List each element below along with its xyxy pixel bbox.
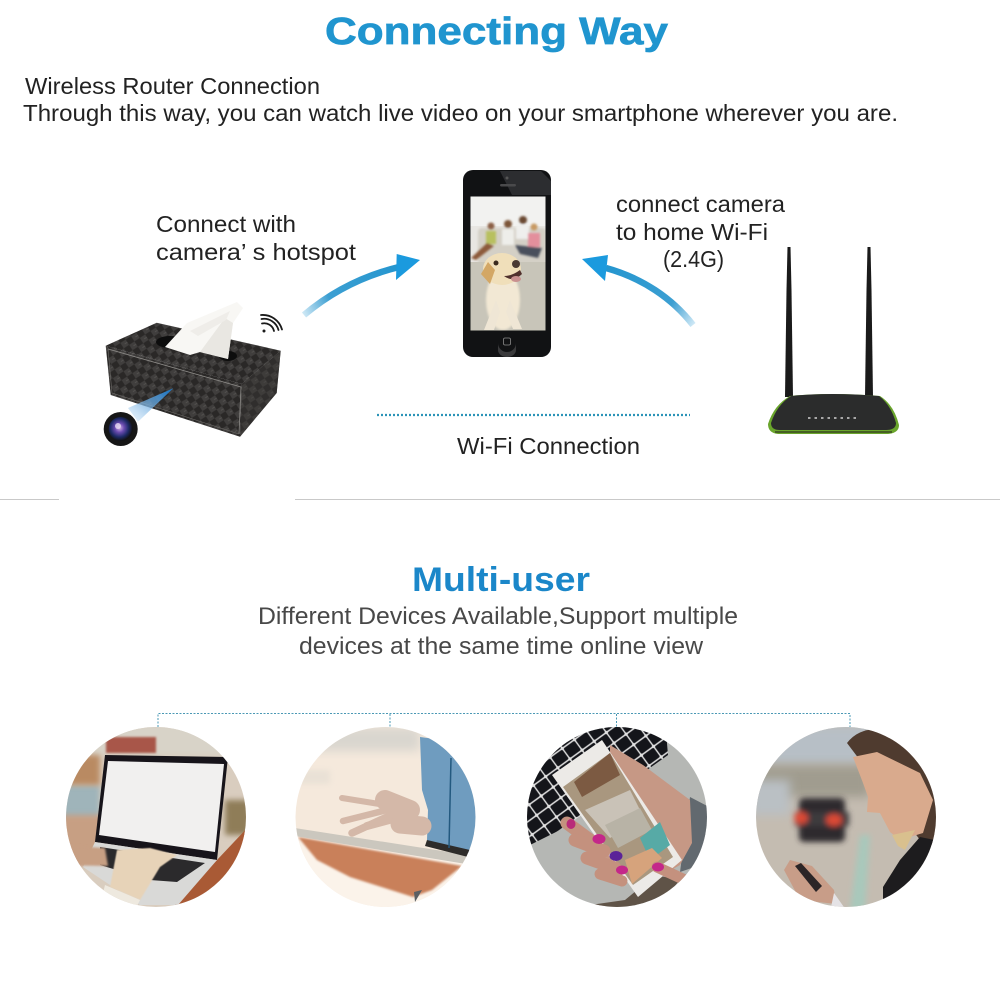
label: connect with camera's hotspot: camera’ s hotspot xyxy=(156,239,357,265)
dotted connector linking devices xyxy=(158,714,850,727)
label: connect with camera's hotspot xyxy=(156,211,357,265)
subheading text block: Through this way, you can watch live video on your smartphone wherever you are. xyxy=(23,100,898,126)
arrow: router to phone xyxy=(582,255,693,325)
label: connect camera to home Wi-Fi xyxy=(616,191,785,272)
label: connect with camera's hotspot: Connect with xyxy=(156,211,296,237)
photo: laptop xyxy=(66,727,246,907)
label: connect camera to home Wi-Fi: (2.4G) xyxy=(663,246,724,272)
icon: wifi signal xyxy=(261,315,282,332)
arrow: camera to phone xyxy=(304,254,420,315)
subheading text block xyxy=(23,73,898,126)
label: connect camera to home Wi-Fi: to home Wi-Fi xyxy=(616,219,768,245)
heading: Multi-user: Multi-user xyxy=(412,561,590,599)
fingers xyxy=(567,823,685,881)
icon: tissue box camera xyxy=(104,302,282,446)
icon: wireless router xyxy=(768,247,899,434)
description text block: Different Devices Available,Support multiple xyxy=(258,603,738,630)
label: connect camera to home Wi-Fi: connect camera xyxy=(616,191,785,217)
phone screen: family and dog photo xyxy=(470,196,546,332)
title: Connecting Way: Connecting Way xyxy=(325,11,668,53)
icon: smartphone xyxy=(463,170,551,357)
hand xyxy=(342,798,422,833)
photo: phone in hand over keyboard xyxy=(527,727,707,907)
description text block: devices at the same time online view xyxy=(299,633,704,660)
subheading text block: Wireless Router Connection xyxy=(25,73,320,99)
photo: woman using phone on street xyxy=(756,727,936,907)
label: Wi-Fi Connection: Wi-Fi Connection xyxy=(457,433,640,459)
photo: hand on tablet xyxy=(296,727,476,907)
icon: camera beam xyxy=(128,388,173,422)
dotted wi-fi connection line xyxy=(377,414,690,416)
description text block xyxy=(258,603,738,660)
section divider xyxy=(0,498,1000,500)
icon: camera lens xyxy=(104,412,138,446)
